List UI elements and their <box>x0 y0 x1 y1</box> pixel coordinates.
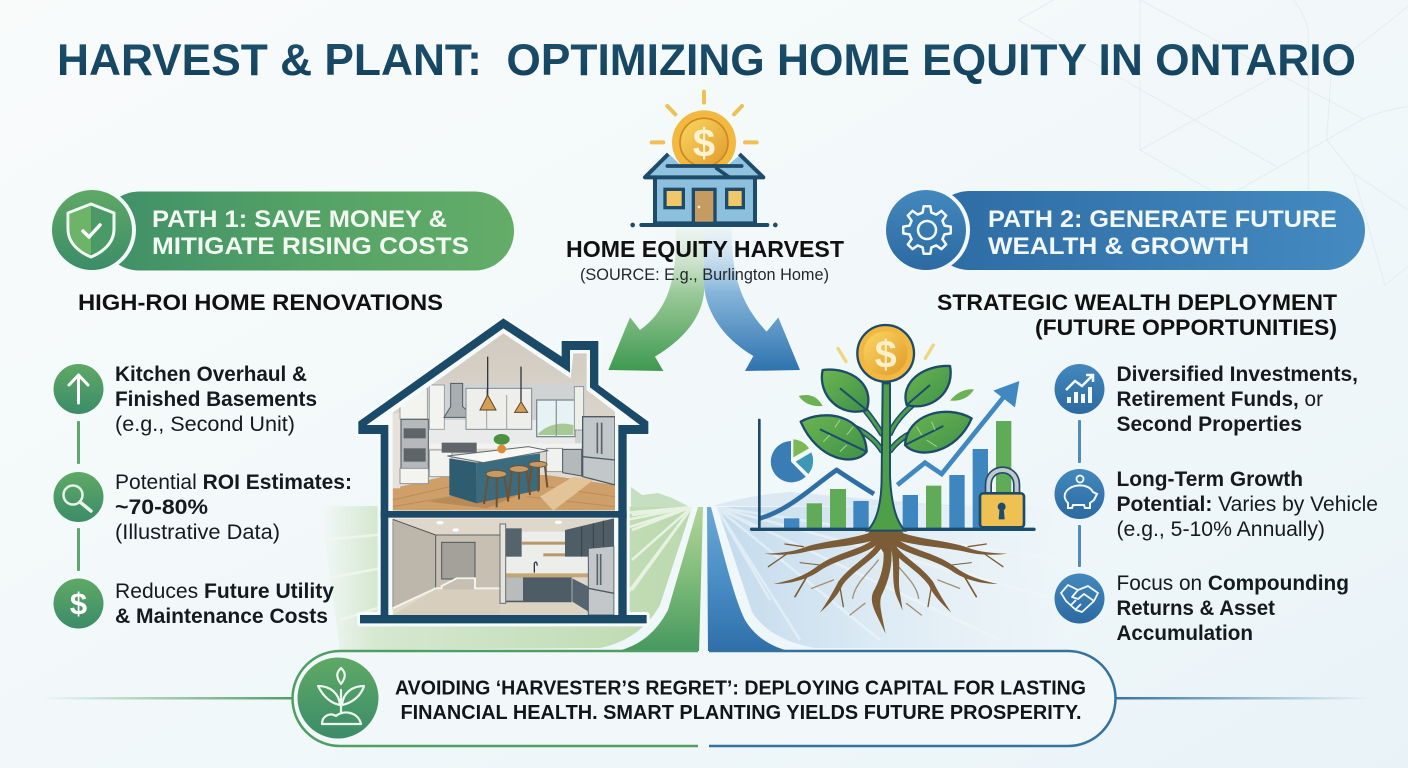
item: kitchen overhaul: Finished Basements <box>115 388 317 411</box>
item: roi estimates: Potential ROI Estimates: <box>115 471 352 494</box>
item: reduces costs <box>54 578 334 628</box>
center heading: HOME EQUITY HARVEST <box>566 236 844 262</box>
lower floor basement <box>393 518 614 615</box>
icon: coin with rays <box>652 92 757 174</box>
item: kitchen overhaul <box>54 363 317 436</box>
path 2 heading: (FUTURE OPPORTUNITIES) <box>1035 315 1337 340</box>
path 1 banner: MITIGATE RISING COSTS <box>152 233 469 260</box>
item: roi estimates <box>54 471 352 544</box>
arrow: to path 2 <box>704 228 800 371</box>
item: investments: Retirement Funds, or <box>1116 388 1323 411</box>
icon: coin with rays: $ <box>693 122 715 166</box>
item: investments <box>1054 363 1358 436</box>
illustration: center home equity source <box>608 92 800 371</box>
connector lines <box>77 421 80 571</box>
path 1 heading: HIGH-ROI HOME RENOVATIONS <box>78 290 443 315</box>
item: long-term growth: Long-Term Growth <box>1116 468 1303 491</box>
item: long-term growth: (e.g., 5-10% Annually) <box>1116 518 1325 541</box>
item: reduces costs: Reduces Future Utility <box>115 580 334 603</box>
center subheading: (SOURCE: E.g., Burlington Home) <box>580 266 829 284</box>
roots <box>764 530 1007 634</box>
item: investments: Diversified Investments, <box>1116 363 1358 386</box>
bar chart <box>752 381 1034 529</box>
plant <box>799 345 974 531</box>
path 2 heading: STRATEGIC WEALTH DEPLOYMENT <box>937 290 1337 315</box>
connector lines <box>1078 420 1081 567</box>
upper floor kitchen <box>390 330 617 513</box>
illustration: green and blue fields <box>320 487 1070 652</box>
item: kitchen overhaul: (e.g., Second Unit) <box>115 413 295 436</box>
item: roi estimates: ~70-80% <box>115 496 208 519</box>
icon: house <box>630 154 778 227</box>
icon: gear <box>903 206 951 254</box>
item: compounding returns: Focus on Compounding <box>1116 572 1349 595</box>
panel: path 2 <box>884 187 1378 645</box>
item: compounding returns: Returns & Asset <box>1116 597 1275 620</box>
path 2 banner: WEALTH & GROWTH <box>988 233 1249 260</box>
path 2 banner <box>884 187 1365 273</box>
padlock <box>980 470 1024 527</box>
path 2 heading <box>937 290 1337 340</box>
panel: path 1 <box>50 187 514 628</box>
path 1 banner <box>50 187 514 273</box>
arrow: to path 1 <box>608 228 704 371</box>
icon: coin: $ <box>875 333 897 377</box>
illustration: money tree and growth chart <box>752 325 1034 634</box>
title: HARVEST & PLANT: OPTIMIZING HOME EQUITY IN ONTARIO <box>57 36 1356 85</box>
path 1 banner: PATH 1: SAVE MONEY & <box>152 206 447 233</box>
icon: coin <box>857 325 914 382</box>
item: reduces costs: $ <box>70 586 87 621</box>
icon: sprout <box>318 668 364 724</box>
callout: harvester's regret banner <box>40 651 1370 746</box>
item: reduces costs: & Maintenance Costs <box>115 605 328 628</box>
item: compounding returns <box>1054 572 1349 645</box>
illustration: renovated house cross-section <box>358 318 648 623</box>
pie chart <box>771 439 813 482</box>
callout: harvester's regret banner: AVOIDING ‘HARVESTER’S REGRET’: DEPLOYING CAPITAL FOR LASTING <box>395 676 1086 700</box>
item: long-term growth: Potential: Varies by Vehicle <box>1116 493 1378 516</box>
item: investments: Second Properties <box>1116 413 1302 436</box>
item: kitchen overhaul: Kitchen Overhaul & <box>115 363 307 386</box>
item: long-term growth <box>1054 468 1378 541</box>
item: compounding returns: Accumulation <box>1116 622 1253 645</box>
path 2 banner: PATH 2: GENERATE FUTURE <box>988 206 1337 233</box>
icon: shield <box>68 204 114 257</box>
callout: harvester's regret banner: FINANCIAL HEALTH. SMART PLANTING YIELDS FUTURE PROSPERITY. <box>400 701 1082 724</box>
item: roi estimates: (Illustrative Data) <box>115 521 280 544</box>
